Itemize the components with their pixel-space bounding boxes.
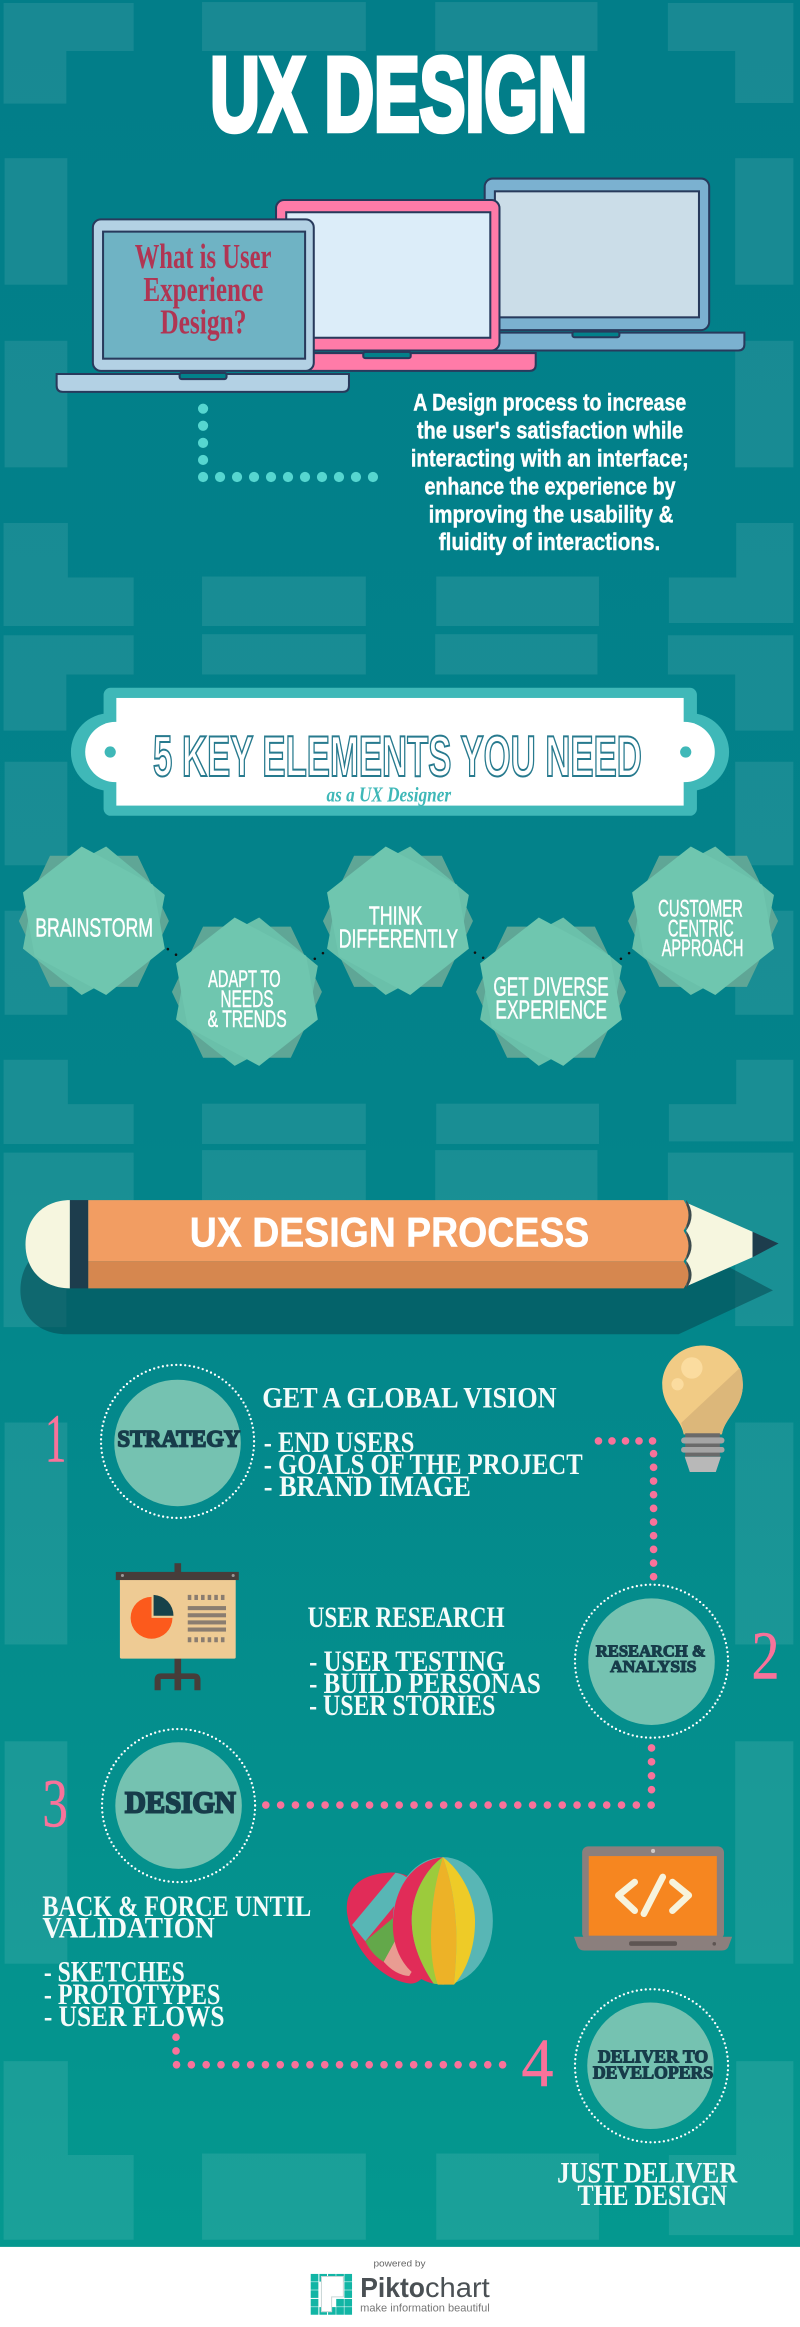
connector dots between badges <box>167 948 630 961</box>
powered by label: powered by <box>373 2258 426 2268</box>
step 1 text: - GOALS OF THE PROJECT <box>264 1449 583 1481</box>
step 4 circle: deliver to developers: DEVELOPERS <box>593 2063 713 2083</box>
step 3 text: - SKETCHES <box>44 1957 185 1989</box>
icon: blue laptop <box>449 179 744 351</box>
icon: pink laptop <box>240 200 536 371</box>
icon: presentation easel <box>116 1563 239 1690</box>
badge: customer centric approach: CENTRIC <box>668 915 734 942</box>
step 4 text <box>557 2158 738 2212</box>
definition text block: interacting with an interface; <box>411 445 689 472</box>
step 1 circle: strategy <box>101 1365 254 1518</box>
question text on laptop screen: Experience <box>143 270 263 309</box>
step 4 text: JUST DELIVER <box>557 2158 738 2190</box>
badge: customer centric approach <box>628 847 778 995</box>
step 3 circle: design <box>102 1729 255 1882</box>
pink dotted connector: step 3 to 4 <box>176 2037 503 2065</box>
title: UX DESIGN <box>210 37 587 154</box>
step 2 circle: research and analysis: ANALYSIS <box>610 1657 696 1676</box>
badge: get diverse experience <box>476 917 626 1066</box>
definition text block: improving the usability & <box>429 501 673 528</box>
step 4 number: 4 <box>521 2025 554 2101</box>
dotted connector <box>203 409 373 477</box>
pencil shadow <box>20 1244 773 1334</box>
step 3 text: - USER FLOWS <box>44 2001 224 2033</box>
badge: think differently: DIFFERENTLY <box>339 926 458 954</box>
icon: striped eggs <box>347 1857 493 1985</box>
step 3 text <box>42 1891 311 2033</box>
definition text block: fluidity of interactions. <box>439 529 660 556</box>
Piktochart logo mark <box>311 2274 352 2315</box>
definition text block: the user's satisfaction while <box>417 417 683 444</box>
pencil banner <box>26 1200 779 1288</box>
badge: think differently <box>323 847 473 995</box>
pink dotted connector: step 2 to 3 <box>266 1748 652 1805</box>
tagline: make information beautiful <box>360 2303 490 2315</box>
badge: think differently: THINK <box>369 903 422 931</box>
definition text block: A Design process to increase <box>413 390 686 417</box>
step 2 circle: research and analysis <box>575 1585 728 1738</box>
section: elements and process <box>19 847 779 1577</box>
question text on laptop screen <box>135 237 271 342</box>
badge: adapt to needs and trends: NEEDS <box>220 986 273 1013</box>
question text on laptop screen: What is User <box>135 237 271 276</box>
Piktochart wordmark light part: chart <box>425 2272 490 2303</box>
step 1 text: - END USERS <box>264 1427 414 1459</box>
icon: code laptop <box>574 1846 732 1950</box>
badge: brainstorm <box>19 847 169 995</box>
step 2 text: - USER STORIES <box>309 1690 495 1722</box>
section: what is UX design <box>57 37 744 816</box>
badge: adapt to needs and trends <box>172 917 322 1066</box>
section: process steps <box>0 1563 800 2327</box>
sign plate: 5 key elements <box>71 688 729 816</box>
step 3 text: VALIDATION <box>42 1913 215 1945</box>
step 1 number: 1 <box>45 1400 66 1476</box>
badge: brainstorm: BRAINSTORM <box>35 914 153 942</box>
step 2 text: - BUILD PERSONAS <box>309 1668 541 1700</box>
definition text block <box>411 390 689 556</box>
footer <box>0 2247 800 2327</box>
step 2 number: 2 <box>752 1618 780 1694</box>
definition text block: enhance the experience by <box>424 473 676 500</box>
step 4 circle: deliver to developers <box>575 1989 728 2142</box>
badge: adapt to needs and trends: & TRENDS <box>208 1006 287 1033</box>
badge: adapt to needs and trends: ADAPT TO <box>208 966 281 993</box>
Piktochart wordmark: Pikto <box>360 2272 425 2303</box>
badge: get diverse experience: EXPERIENCE <box>495 996 607 1024</box>
step 2 text: USER RESEARCH <box>308 1602 505 1634</box>
step 1 circle: strategy: STRATEGY <box>117 1427 240 1453</box>
badge: customer centric approach: CUSTOMER <box>658 895 743 922</box>
step 1 text: GET A GLOBAL VISION <box>262 1383 557 1415</box>
badge: customer centric approach: APPROACH <box>662 935 743 962</box>
step 1 text: - BRAND IMAGE <box>264 1471 471 1503</box>
step 2 text <box>308 1602 541 1722</box>
step 3 text: BACK & FORCE UNTIL <box>42 1891 311 1923</box>
step 2 text: - USER TESTING <box>309 1646 505 1678</box>
step 4 circle: deliver to developers: DELIVER TO <box>598 2047 708 2067</box>
step 3 number: 3 <box>42 1765 68 1841</box>
step 2 circle: research and analysis: RESEARCH & <box>596 1642 706 1661</box>
subheading: as a UX Designer <box>327 783 452 807</box>
step 3 text: - PROTOTYPES <box>44 1979 220 2011</box>
step 3 circle: design: DESIGN <box>125 1786 236 1820</box>
question text on laptop screen: Design? <box>160 303 246 342</box>
icon: front laptop <box>57 219 349 392</box>
step 4 text: THE DESIGN <box>578 2180 727 2212</box>
icon: light bulb <box>662 1346 743 1472</box>
badge: get diverse experience: GET DIVERSE <box>493 974 609 1002</box>
step 1 text <box>262 1383 583 1503</box>
heading: UX design process: UX DESIGN PROCESS <box>190 1209 589 1256</box>
pink dotted connector: step 1 to 2 <box>598 1441 654 1577</box>
